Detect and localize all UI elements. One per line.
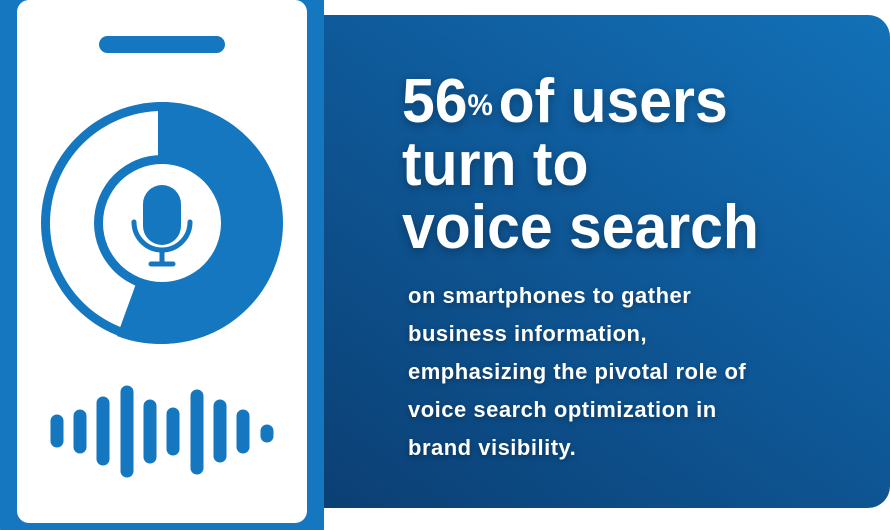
icon: microphone bbox=[134, 185, 190, 264]
title: voice search bbox=[402, 193, 759, 262]
title bbox=[400, 67, 760, 262]
text block: description bbox=[407, 283, 747, 462]
icon: sound wave bbox=[57, 392, 267, 471]
phone illustration bbox=[0, 0, 324, 530]
title: 56%of users bbox=[402, 67, 728, 136]
speaker bar bbox=[99, 36, 225, 53]
text block: description: on smartphones to gather bbox=[408, 283, 691, 308]
text block: description: voice search optimization in bbox=[408, 397, 717, 422]
text block: description: business information, bbox=[408, 321, 647, 346]
text block: description: emphasizing the pivotal role of bbox=[408, 359, 746, 384]
panel: blue text background bbox=[318, 15, 890, 508]
text block: description: brand visibility. bbox=[408, 435, 576, 460]
phone frame bbox=[0, 0, 324, 530]
donut chart 56% bbox=[41, 102, 283, 344]
title: turn to bbox=[402, 130, 588, 199]
